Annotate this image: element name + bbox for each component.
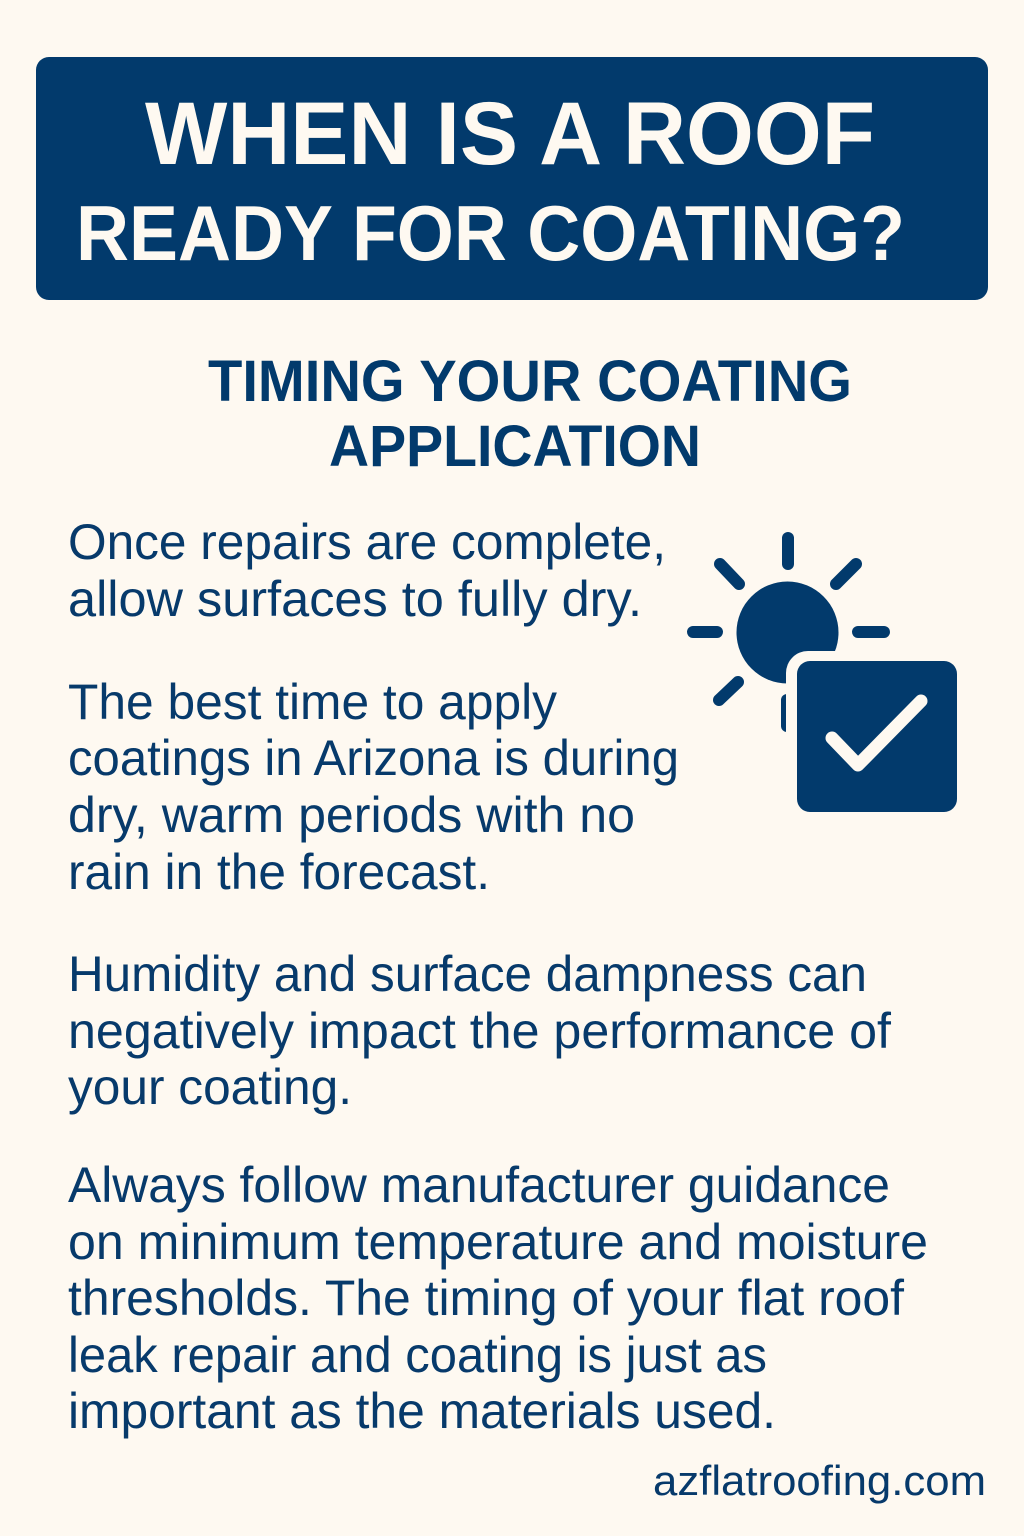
text block: best time: coatings in Arizona is during xyxy=(68,730,679,786)
section heading xyxy=(208,349,852,479)
text block: manufacturer guidance: thresholds. The timing of your flat roof xyxy=(68,1270,904,1326)
text block: dry surfaces: Once repairs are complete, xyxy=(68,514,666,570)
text block: humidity: negatively impact the performance of xyxy=(68,1003,891,1059)
text block: manufacturer guidance: on minimum temperature and moisture xyxy=(68,1214,928,1270)
text block: best time: The best time to apply xyxy=(68,674,557,730)
icon: sun with checkmark xyxy=(693,538,976,831)
title banner: WHEN IS A ROOF xyxy=(145,83,875,183)
text block: humidity xyxy=(68,946,891,1115)
text block: manufacturer guidance: Always follow manufacturer guidance xyxy=(68,1157,890,1213)
text block: manufacturer guidance: leak repair and coating is just as xyxy=(68,1327,767,1383)
section heading: TIMING YOUR COATING xyxy=(208,349,852,414)
text block: dry surfaces xyxy=(68,514,666,627)
text block: manufacturer guidance xyxy=(68,1157,928,1439)
text block: best time xyxy=(68,674,679,900)
title banner: READY FOR COATING? xyxy=(76,189,905,277)
text block: best time: dry, warm periods with no xyxy=(68,787,635,843)
text block: dry surfaces: allow surfaces to fully dry. xyxy=(68,571,642,627)
title banner xyxy=(36,57,988,300)
text block: humidity: Humidity and surface dampness can xyxy=(68,946,867,1002)
text block: humidity: your coating. xyxy=(68,1059,352,1115)
text block: manufacturer guidance: important as the materials used. xyxy=(68,1383,776,1439)
text block: best time: rain in the forecast. xyxy=(68,844,490,900)
section heading: APPLICATION xyxy=(329,414,701,479)
footer website: azflatroofing.com xyxy=(653,1457,986,1504)
